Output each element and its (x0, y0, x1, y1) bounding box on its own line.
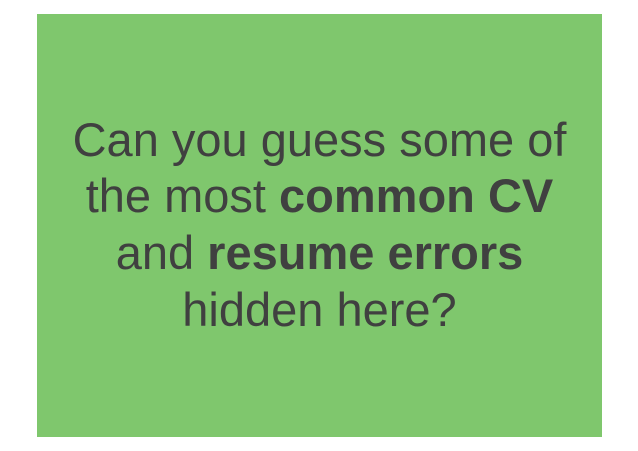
heading: question text: hidden here? (182, 283, 457, 336)
heading: question text: Can you guess some of (73, 113, 566, 166)
heading: question text: the most common CV (86, 169, 553, 222)
heading: question text: and resume errors (116, 226, 523, 279)
